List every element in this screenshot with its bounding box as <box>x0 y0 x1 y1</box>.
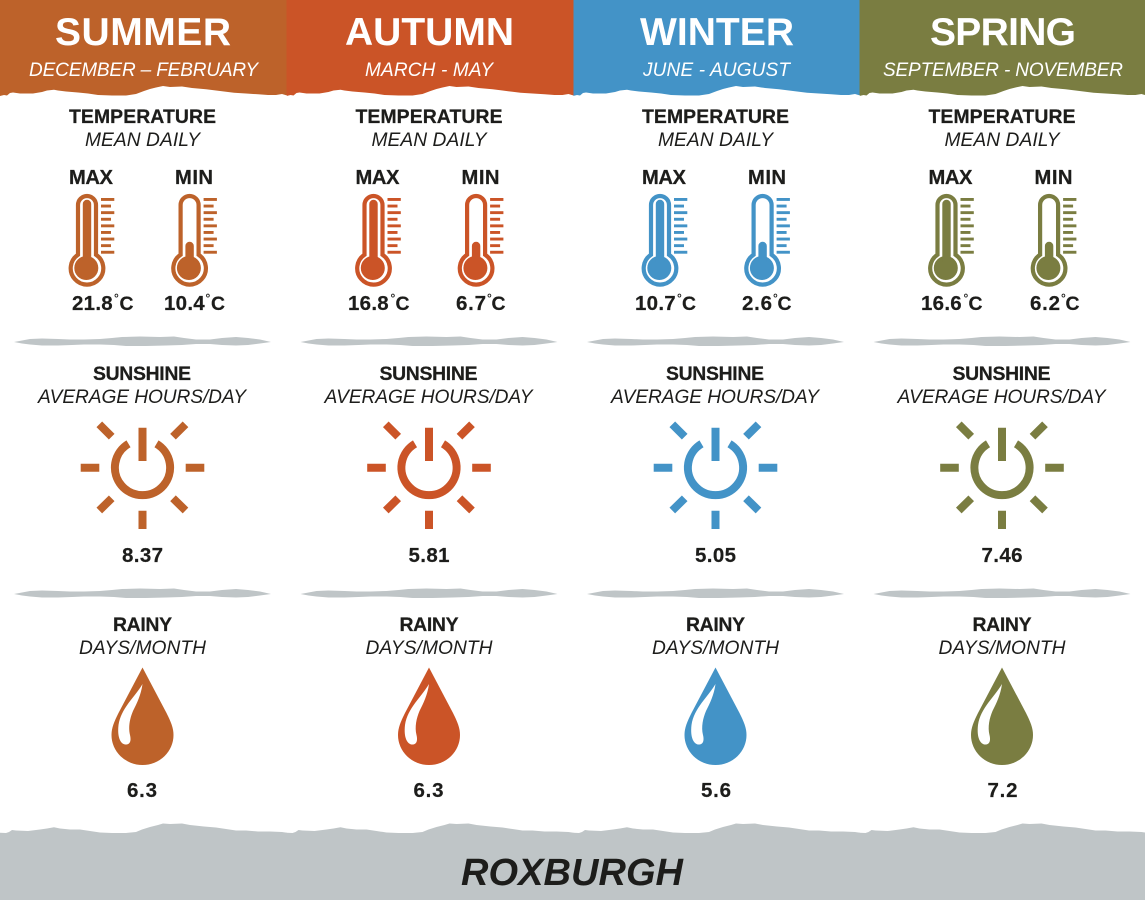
value: min temperature <box>456 291 506 315</box>
value: min temperature: C <box>1066 293 1080 315</box>
value: rainy days: 6.3 <box>414 779 444 802</box>
heading: autumn: AUTUMN <box>345 11 514 54</box>
subheading: spring months: SEPTEMBER - NOVEMBER <box>883 60 1123 81</box>
icon: rain drop <box>971 668 1033 765</box>
value: max temperature: 10.7 <box>635 292 676 315</box>
icon: rain drop <box>398 668 460 765</box>
icon: sun <box>367 424 491 529</box>
heading: spring: SPRING <box>930 11 1076 54</box>
panel: summer column <box>37 106 247 802</box>
panel: summer header <box>0 0 286 100</box>
icon: thermometer min <box>746 196 790 285</box>
icon: sun <box>654 424 777 529</box>
panel: spring column <box>896 106 1107 802</box>
icon: sun <box>940 424 1064 529</box>
value: min temperature: 10.4 <box>164 292 205 315</box>
value: min temperature: C <box>492 293 506 315</box>
value: min temperature: ° <box>1061 291 1066 305</box>
value: max temperature: C <box>968 293 983 315</box>
value: sunshine: 7.46 <box>982 544 1022 567</box>
value: min temperature: C <box>778 293 792 315</box>
value: min temperature: 2.6 <box>742 292 772 315</box>
value: min temperature: ° <box>487 291 492 305</box>
value: rainy days: 7.2 <box>988 779 1018 802</box>
panel: winter header <box>574 0 860 100</box>
value: sunshine: 5.81 <box>408 544 450 567</box>
value: max temperature: 16.6 <box>921 292 962 315</box>
subheading: summer months: DECEMBER – FEBRUARY <box>29 60 259 81</box>
value: max temperature <box>72 291 134 315</box>
icon: thermometer max <box>71 196 114 285</box>
icon: thermometer min <box>1033 196 1076 285</box>
value: sunshine: 5.05 <box>695 544 736 567</box>
value: min temperature: ° <box>206 291 210 305</box>
icon: rain drop <box>112 668 174 765</box>
value: max temperature: ° <box>964 291 968 305</box>
footer title: Roxburgh: ROXBURGH <box>461 852 685 894</box>
value: max temperature: ° <box>114 291 119 305</box>
heading: winter: WINTER <box>640 11 794 54</box>
value: min temperature <box>164 291 225 315</box>
icon: thermometer max <box>644 196 687 285</box>
icon: rain drop <box>684 668 746 765</box>
panel: autumn column <box>324 106 534 802</box>
panel: spring header <box>860 0 1145 100</box>
value: min temperature <box>1030 291 1080 315</box>
panel: autumn header <box>286 0 574 100</box>
icon: sun <box>81 424 204 529</box>
value: max temperature: 16.8 <box>348 292 389 315</box>
heading: summer: SUMMER <box>55 11 231 54</box>
footer band <box>0 824 1145 900</box>
value: max temperature: C <box>396 293 410 315</box>
value: rainy days: 5.6 <box>701 779 731 802</box>
value: max temperature: ° <box>390 291 396 305</box>
value: min temperature: C <box>211 293 225 315</box>
value: max temperature: 21.8 <box>72 292 113 315</box>
icon: thermometer min <box>460 196 503 285</box>
value: max temperature <box>348 291 410 315</box>
value: min temperature: ° <box>773 291 778 305</box>
value: max temperature: ° <box>677 291 682 305</box>
value: sunshine: 8.37 <box>122 544 163 567</box>
subheading: autumn months: MARCH - MAY <box>365 60 494 81</box>
icon: thermometer min <box>173 196 217 285</box>
panel: winter column <box>610 106 820 802</box>
value: rainy days: 6.3 <box>127 779 157 802</box>
icon: thermometer max <box>930 196 974 285</box>
value: max temperature: C <box>682 293 696 315</box>
subheading: winter months: JUNE - AUGUST <box>642 60 791 81</box>
value: max temperature <box>635 291 696 315</box>
value: max temperature: C <box>120 293 134 315</box>
value: max temperature <box>921 291 983 315</box>
value: min temperature <box>742 291 792 315</box>
value: min temperature: 6.7 <box>456 292 486 315</box>
icon: thermometer max <box>357 196 401 285</box>
value: min temperature: 6.2 <box>1030 292 1060 315</box>
